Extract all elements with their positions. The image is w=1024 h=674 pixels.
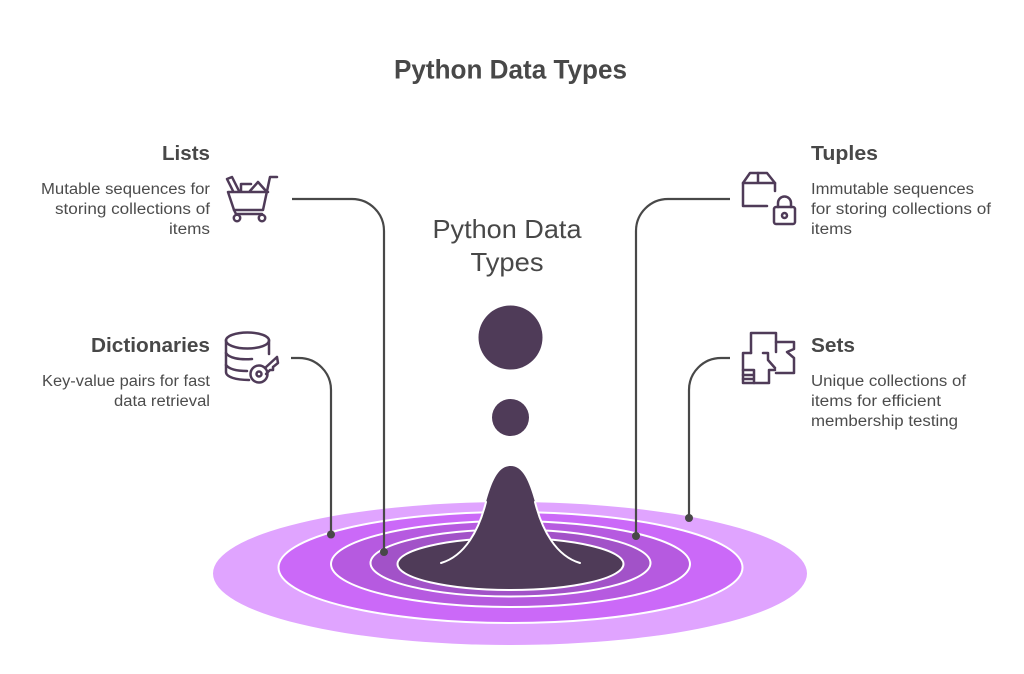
panel: sets: [811, 335, 967, 430]
text: tuples: items: [811, 221, 852, 238]
text: lists: Mutable sequences for: [41, 181, 210, 198]
text: dictionaries: [42, 373, 211, 410]
text: tuples: [811, 181, 992, 238]
panel: dictionaries: [42, 335, 211, 410]
heading: dictionaries: Dictionaries: [91, 335, 210, 357]
connector: dictionaries: [291, 358, 335, 538]
large droplet: [478, 306, 542, 370]
small droplet: [492, 399, 529, 436]
text: dictionaries: Key-value pairs for fast: [42, 373, 211, 390]
central peak: [441, 466, 580, 563]
connector: tuples: [632, 199, 730, 540]
text: sets: [811, 373, 967, 430]
text: lists: [41, 181, 211, 238]
icon: shopping cart: [227, 177, 277, 221]
text: dictionaries: data retrieval: [114, 393, 210, 410]
heading: lists: Lists: [162, 143, 210, 165]
center label: [432, 214, 582, 277]
text: sets: items for efficient: [811, 393, 942, 410]
center label: Python Data: [432, 214, 582, 244]
connector: lists: [292, 199, 388, 556]
title: Python Data Types: [394, 54, 627, 84]
text: lists: storing collections of: [55, 201, 211, 218]
text: sets: membership testing: [811, 413, 958, 430]
text: lists: items: [169, 221, 210, 238]
icon: database with key: [226, 332, 278, 382]
ripple rings: [213, 502, 807, 645]
text: tuples: for storing collections of: [811, 201, 992, 218]
heading: sets: Sets: [811, 335, 855, 357]
text: sets: Unique collections of: [811, 373, 967, 390]
connector: sets: [685, 358, 730, 522]
icon: floor plan: [743, 333, 794, 383]
panel: lists: [41, 143, 211, 238]
panel: tuples: [811, 143, 992, 238]
heading: tuples: Tuples: [811, 143, 878, 165]
peak outline: [441, 502, 580, 563]
text: tuples: Immutable sequences: [811, 181, 974, 198]
center label: Types: [470, 247, 544, 277]
icon: box with lock: [743, 173, 795, 224]
